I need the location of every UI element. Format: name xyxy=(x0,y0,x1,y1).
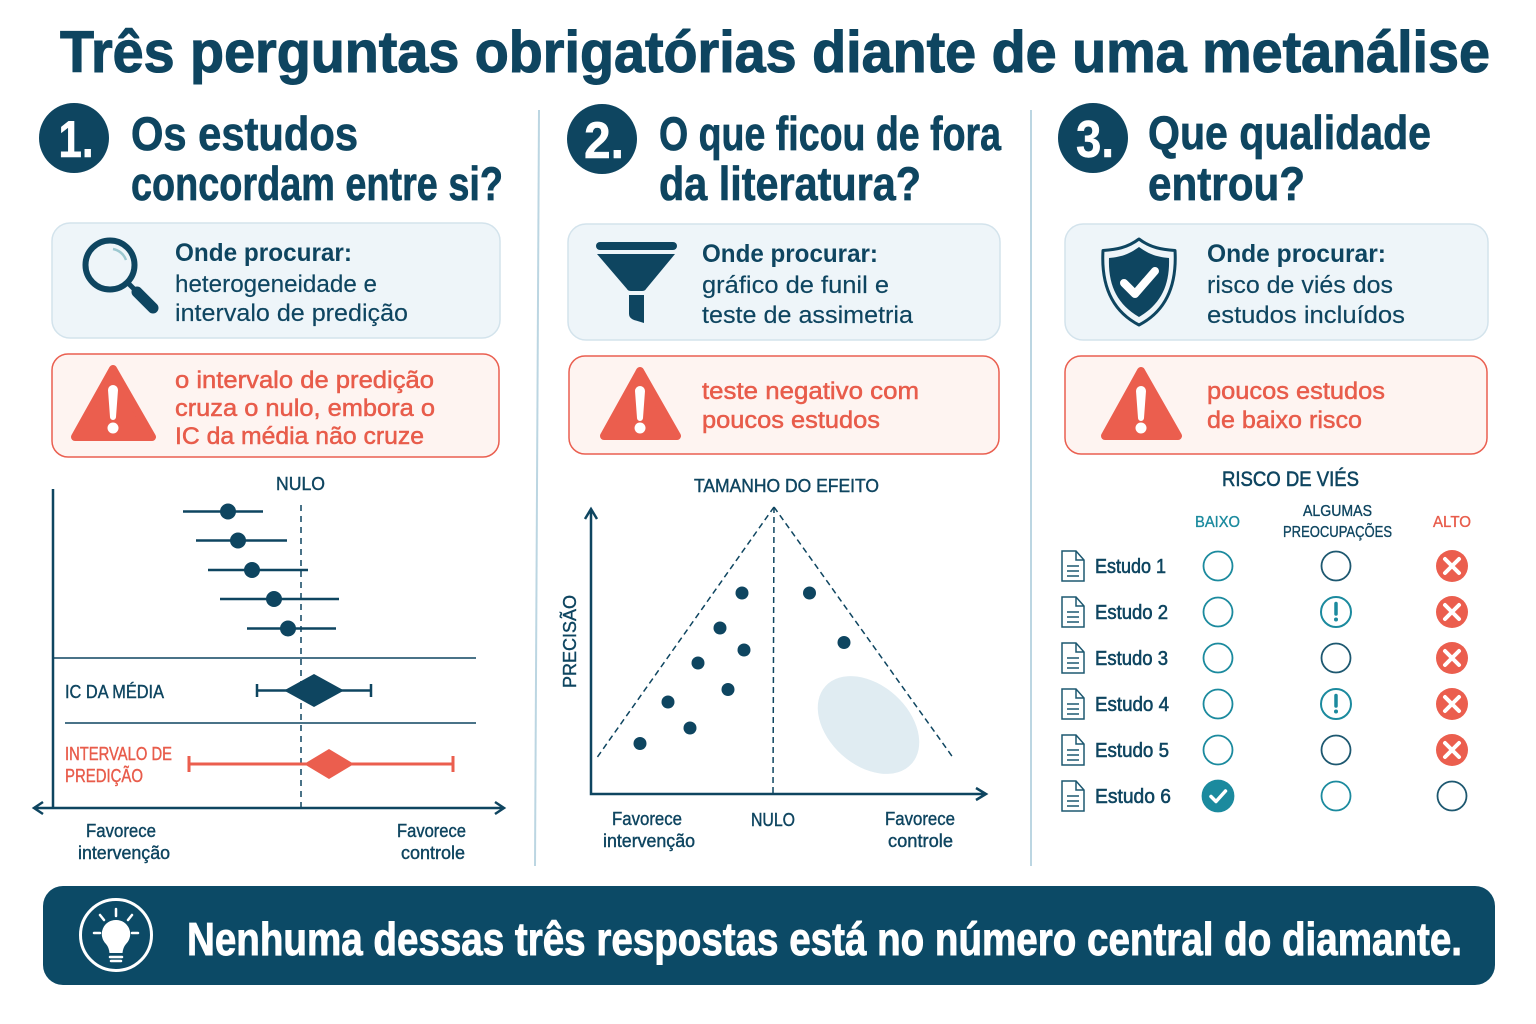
column headers: BAIXO xyxy=(1195,514,1240,531)
heading 2: O que ficou de fora xyxy=(659,107,1002,160)
chart: funnel plot xyxy=(559,476,986,851)
banner: conclusão xyxy=(43,886,1495,985)
labels: favorece: controle xyxy=(401,843,465,863)
number badge 2: 2. xyxy=(584,112,624,170)
card: onde procurar 3 xyxy=(1065,224,1488,340)
card text 3: Onde procurar: xyxy=(1207,240,1386,268)
heading 2: da literatura? xyxy=(659,157,921,210)
warning card 2 xyxy=(569,356,999,454)
row labels with document icons: Estudo 3 xyxy=(1095,648,1168,670)
warning text 3: de baixo risco xyxy=(1207,407,1362,434)
card text 1 xyxy=(175,239,408,327)
row labels with document icons xyxy=(1062,551,1171,811)
heading 1: Os estudos xyxy=(131,107,358,160)
forest plot studies xyxy=(183,504,339,636)
row labels with document icons: Estudo 4 xyxy=(1095,694,1169,716)
chart: funnel plot: TAMANHO DO EFEITO xyxy=(694,476,879,496)
icon: warning triangle xyxy=(604,371,677,436)
column headers: ALGUMAS xyxy=(1303,503,1372,520)
labels: favorece: Favorece xyxy=(612,809,682,829)
row labels with document icons: Estudo 1 xyxy=(1095,556,1166,578)
labels: favorece xyxy=(603,809,955,851)
icon: shield xyxy=(1103,239,1175,325)
card text 1: intervalo de predição xyxy=(175,300,408,327)
warning text 1: o intervalo de predição xyxy=(175,367,434,394)
title: Três perguntas obrigatórias diante de uma metanálise xyxy=(60,20,1490,85)
card text 2: gráfico de funil e xyxy=(702,272,889,299)
card text 1: Onde procurar: xyxy=(175,239,352,267)
warning text 1 xyxy=(175,367,435,450)
heading 1: concordam entre si? xyxy=(131,157,503,210)
chart: forest plot xyxy=(34,474,504,863)
column: baixo xyxy=(1202,552,1234,812)
heading 3 xyxy=(1148,106,1431,210)
icon: funnel xyxy=(596,242,677,323)
table: risco de viés xyxy=(1062,468,1471,812)
warning text 3: poucos estudos xyxy=(1207,378,1385,405)
card: onde procurar 1 xyxy=(52,223,500,338)
number badge 1 xyxy=(39,103,109,173)
number badge 3: 3. xyxy=(1076,111,1114,169)
warning text 3 xyxy=(1207,378,1385,434)
card text 3 xyxy=(1207,240,1405,329)
table: risco de viés: RISCO DE VIÉS xyxy=(1222,468,1359,491)
warning card 1 xyxy=(52,354,499,457)
chart: funnel plot: PRECISÃO xyxy=(559,595,580,688)
intervalo de predição: PREDIÇÃO xyxy=(65,765,143,786)
funnel plot dots xyxy=(634,586,850,750)
column: alto xyxy=(1436,550,1468,810)
panel: pergunta 1 xyxy=(34,103,504,863)
number badge 3 xyxy=(1058,103,1128,173)
row labels with document icons: Estudo 5 xyxy=(1095,740,1169,762)
icon: warning triangle xyxy=(1105,371,1178,436)
card text 1: heterogeneidade e xyxy=(175,271,377,298)
number badge 2 xyxy=(567,104,637,174)
labels: favorece: Favorece xyxy=(397,821,466,841)
card text 2: teste de assimetria xyxy=(702,302,914,329)
heading 2 xyxy=(659,107,1002,210)
arrow: eixos xyxy=(585,509,986,800)
warning text 2 xyxy=(702,378,919,434)
card text 2 xyxy=(702,240,914,329)
labels: favorece: Favorece xyxy=(885,809,955,829)
column: algumas preocupações xyxy=(1321,552,1351,810)
arrow: eixo horizontal xyxy=(34,802,504,814)
icon: magnifying glass xyxy=(86,240,153,308)
number badge 1: 1. xyxy=(58,111,94,169)
IC da média: IC DA MÉDIA xyxy=(65,682,164,702)
card text 3: risco de viés dos xyxy=(1207,272,1393,299)
labels: favorece xyxy=(78,821,466,863)
heading 1 xyxy=(131,107,503,210)
column headers: ALTO xyxy=(1433,514,1471,531)
blob: estudos ausentes xyxy=(799,656,938,794)
warning text 1: cruza o nulo, embora o xyxy=(175,395,435,422)
chart: forest plot: NULO xyxy=(276,474,325,494)
heading 3: entrou? xyxy=(1148,157,1305,210)
icon: light bulb xyxy=(80,900,152,970)
warning text 2: poucos estudos xyxy=(702,407,880,434)
intervalo de predição: INTERVALO DE xyxy=(65,744,172,764)
labels: favorece: controle xyxy=(888,831,953,851)
labels: favorece: intervenção xyxy=(78,843,170,863)
labels: favorece: intervenção xyxy=(603,831,695,851)
warning card 3 xyxy=(1065,356,1487,454)
column headers xyxy=(1195,503,1471,541)
warning text 1: IC da média não cruze xyxy=(175,423,424,450)
IC da média xyxy=(65,674,371,707)
card text 3: estudos incluídos xyxy=(1207,302,1405,329)
labels: favorece: NULO xyxy=(751,810,795,830)
warning text 2: teste negativo com xyxy=(702,378,919,405)
row labels with document icons: Estudo 2 xyxy=(1095,602,1168,624)
row labels with document icons: Estudo 6 xyxy=(1095,786,1171,808)
panel: pergunta 3 xyxy=(1058,103,1488,812)
column headers: PREOCUPAÇÕES xyxy=(1283,521,1392,541)
labels: favorece: Favorece xyxy=(86,821,156,841)
icon: warning triangle xyxy=(75,369,152,437)
card: onde procurar 2 xyxy=(568,224,1000,340)
heading 3: Que qualidade xyxy=(1148,106,1431,159)
panel: pergunta 2 xyxy=(559,104,1002,851)
intervalo de predição xyxy=(65,744,453,786)
card text 2: Onde procurar: xyxy=(702,240,878,268)
